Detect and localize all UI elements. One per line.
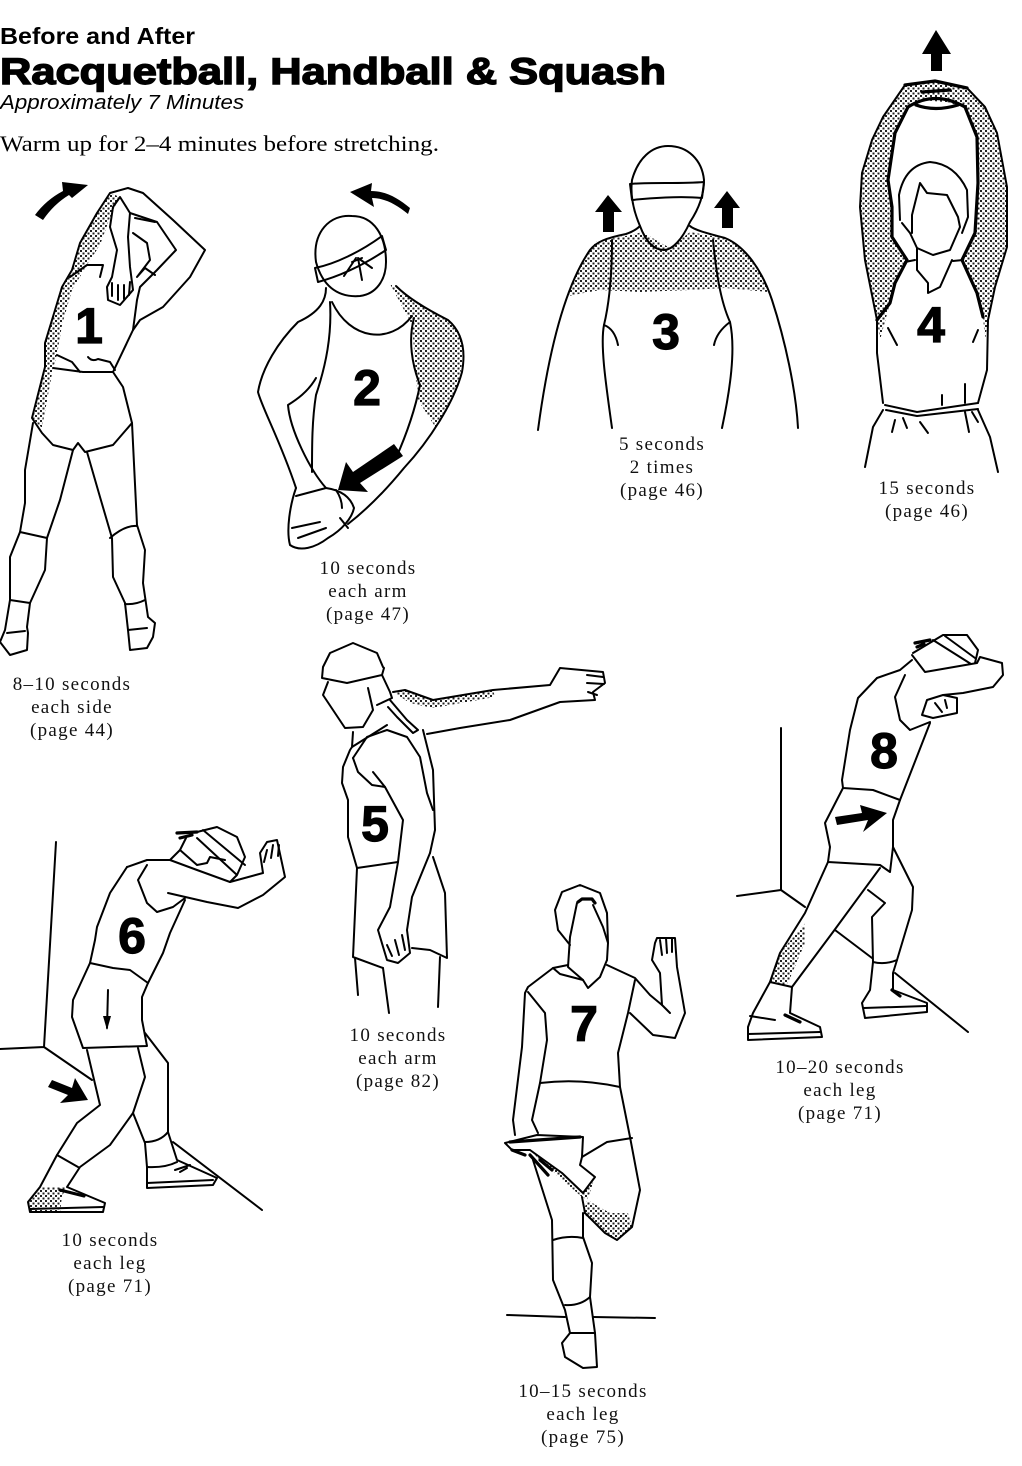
figure 2: arm pull behind back [258,183,463,549]
caption 7: (page 75) [541,1427,625,1448]
arrow up [922,30,951,71]
arrow curved [35,182,88,220]
caption 3: 5 seconds [619,434,705,455]
shaded shoulders [568,232,768,296]
figure 7: standing quad stretch [505,885,685,1368]
wall lines [0,842,262,1210]
caption 8: (page 71) [798,1103,882,1124]
title block [0,23,666,156]
figure 1: side stretch with arm overhead [0,182,205,655]
caption 6: 10 seconds [62,1230,158,1251]
caption 3: 2 times [630,457,694,478]
number 6: 6 [118,908,146,964]
arrow up right [714,191,740,228]
number 2: 2 [353,360,381,416]
small down arrow [107,990,108,1028]
bold knee arrow [48,1078,88,1103]
duration: Approximately 7 Minutes [0,92,244,114]
caption 5: (page 82) [356,1071,440,1092]
figure 5: arm across shoulder stretch [322,643,605,1013]
caption 1: each side [31,697,113,718]
figure 3: shoulder shrug [538,146,798,430]
caption 3: (page 46) [620,480,704,501]
arrow up left [595,195,622,232]
figure 6: calf stretch at wall [0,827,285,1212]
caption 1: 8–10 seconds [13,674,131,695]
number 7: 7 [570,996,598,1052]
caption 5: 10 seconds [350,1025,446,1046]
figure 4: overhead arm stretch [860,30,1007,472]
thigh arrow [835,805,887,832]
shaded knee and shin [530,1150,632,1240]
shaded leg [770,923,805,985]
number 8: 8 [870,723,898,779]
caption 1: (page 44) [30,720,114,741]
caption 2: 10 seconds [320,558,416,579]
caption 4: 15 seconds [879,478,975,499]
caption 8: 10–20 seconds [775,1057,905,1078]
shaded arms [860,82,1007,340]
warm up instruction: Warm up for 2–4 minutes before stretching. [0,131,439,156]
subtitle: before and after: Before and After [0,23,195,49]
wall lines [737,728,968,1032]
number 1: 1 [75,298,103,354]
number 3: 3 [652,304,680,360]
arrow diagonal [338,444,403,492]
arrow curved [350,183,410,214]
caption 7: each leg [546,1404,620,1425]
number 5: 5 [361,796,389,852]
caption 8: each leg [803,1080,877,1101]
caption 7: 10–15 seconds [518,1381,648,1402]
caption 6: each leg [73,1253,147,1274]
main title: Racquetball, Handball & Squash [0,51,666,92]
floor line [507,1315,655,1318]
figure 8: back-leg calf stretch at wall [737,635,1003,1040]
shaded arm [393,690,495,708]
caption 6: (page 71) [68,1276,152,1297]
number 4: 4 [917,297,945,353]
caption 2: (page 47) [326,604,410,625]
caption 5: each arm [358,1048,438,1069]
shaded stretch area 1 [32,193,120,428]
caption 2: each arm [328,581,408,602]
shaded shoulder and neck [388,280,463,428]
caption 4: (page 46) [885,501,969,522]
shaded foot [28,1187,67,1212]
